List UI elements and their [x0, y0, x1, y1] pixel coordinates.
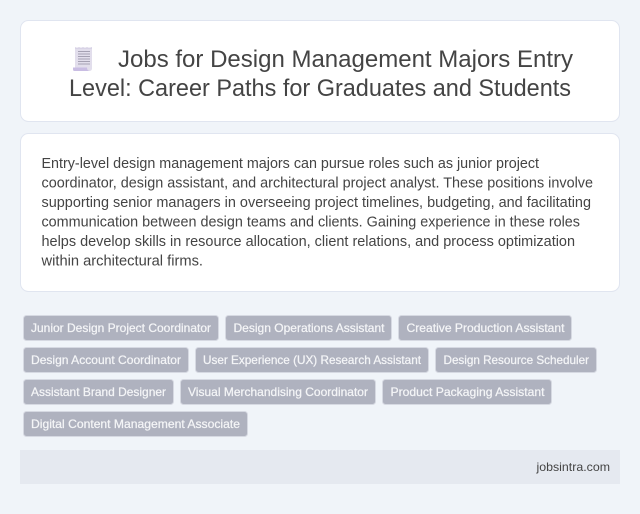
tag: Design Operations Assistant: [226, 316, 392, 340]
description text: [40, 156, 593, 270]
tag: Visual Merchandising Coordinator: Visual Merchandising Coordinator: [188, 385, 368, 399]
tag: Design Account Coordinator: Design Account Coordinator: [31, 353, 181, 367]
tag: Visual Merchandising Coordinator: [180, 380, 376, 404]
title heading: Level: Career Paths for Graduates and Students: [69, 75, 571, 102]
tag: Digital Content Management Associate: [24, 412, 248, 436]
tag: Creative Production Assistant: [398, 316, 572, 340]
title heading: [69, 46, 573, 102]
tag: Design Resource Scheduler: Design Resource Scheduler: [444, 353, 589, 367]
tag: Digital Content Management Associate: Digital Content Management Associate: [31, 417, 240, 431]
tag: Product Packaging Assistant: Product Packaging Assistant: [390, 385, 545, 399]
description text: supporting senior managers in overseeing project timelines, budgeting, and facilitating: [42, 195, 591, 211]
tag: Design Resource Scheduler: [436, 348, 596, 372]
panel: title card: [20, 20, 620, 122]
description text: communication between design teams and clients. Gaining experience in these roles: [42, 214, 580, 230]
tag: Junior Design Project Coordinator: Junior Design Project Coordinator: [31, 321, 211, 335]
job tags: [24, 316, 596, 436]
description text: coordinator, design assistant, and architectural project analyst. These positions involve: [42, 176, 593, 192]
footer bar: [20, 450, 620, 484]
panel: description card: [20, 134, 620, 292]
tag: User Experience (UX) Research Assistant: [196, 348, 428, 372]
description text: Entry-level design management majors can pursue roles such as junior project: [42, 156, 539, 172]
icon: scroll document: [73, 47, 92, 71]
tag: Assistant Brand Designer: [24, 380, 174, 404]
footer source text: jobsintra.com: [535, 460, 610, 474]
tag: Creative Production Assistant: Creative Production Assistant: [406, 321, 565, 335]
tag: User Experience (UX) Research Assistant: User Experience (UX) Research Assistant: [203, 353, 422, 367]
description text: helps develop skills in resource allocation, client relations, and process optimization: [42, 234, 575, 250]
description text: within architectural firms.: [40, 254, 203, 270]
title heading: Jobs for Design Management Majors Entry: [118, 46, 573, 73]
tag: Design Account Coordinator: [24, 348, 188, 372]
tag: Product Packaging Assistant: [382, 380, 552, 404]
tag: Assistant Brand Designer: Assistant Brand Designer: [31, 385, 166, 399]
tag: Design Operations Assistant: Design Operations Assistant: [234, 321, 385, 335]
tag: Junior Design Project Coordinator: [24, 316, 218, 340]
